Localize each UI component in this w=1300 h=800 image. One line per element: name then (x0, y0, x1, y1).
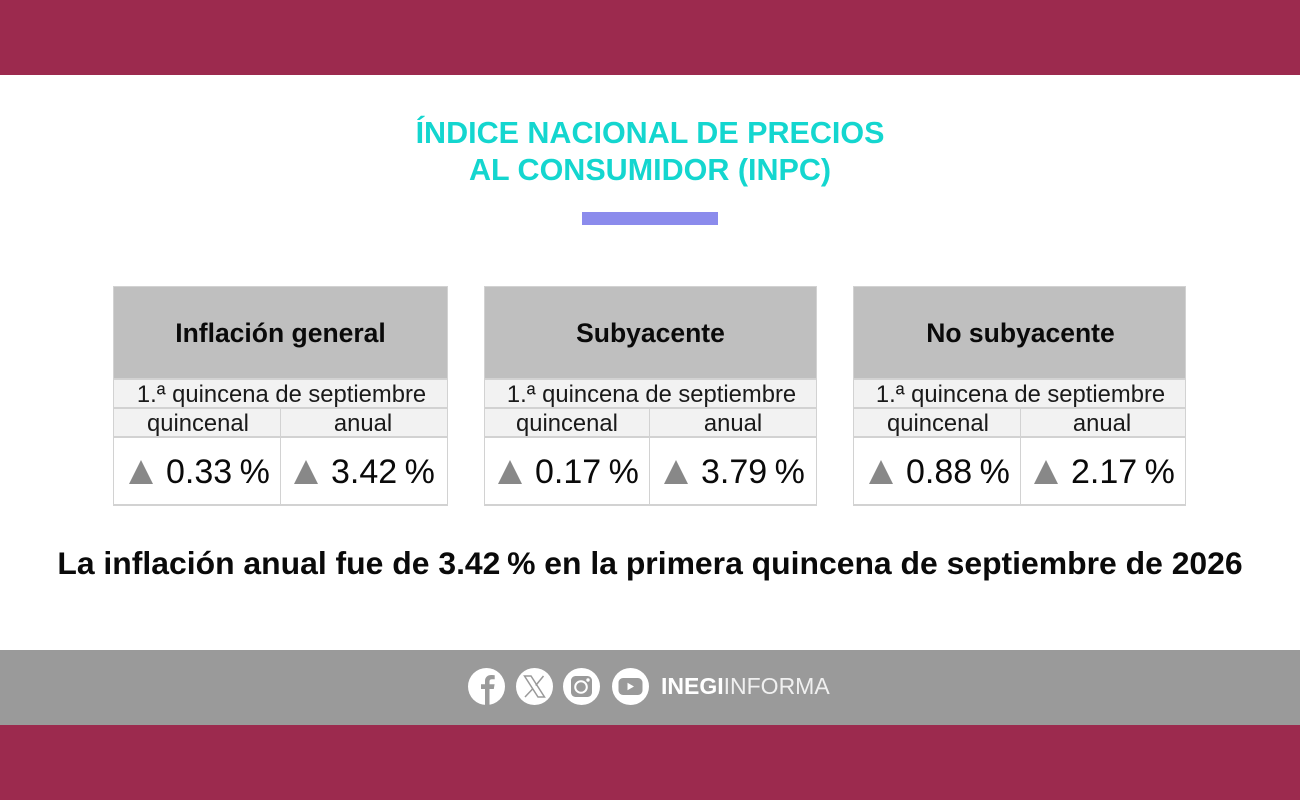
footer grey band (0, 650, 1300, 725)
value: anual 2.17: 2.17 % (1071, 453, 1175, 491)
column label: anual: anual (704, 410, 762, 437)
value: anual 3.42 (281, 438, 447, 504)
period label: 1.ª quincena de septiembre (507, 381, 796, 408)
value: anual 3.79: 3.79 % (701, 453, 805, 491)
column label: anual: anual (334, 410, 392, 437)
value: quincenal 0.88 (854, 438, 1020, 504)
value: anual 3.79 (650, 438, 816, 504)
panel: subyacente (484, 286, 817, 506)
period label: 1.ª quincena de septiembre (137, 381, 426, 408)
title (416, 116, 884, 187)
heading: inflación general: Inflación general (175, 318, 386, 348)
icon: youtube (612, 668, 649, 705)
value: quincenal 0.17 (485, 438, 649, 504)
panel: no subyacente (853, 286, 1186, 506)
column label: quincenal (485, 409, 649, 436)
panel: inflación general (113, 286, 448, 506)
heading: subyacente: Subyacente (576, 318, 725, 348)
heading: subyacente (485, 287, 816, 378)
value: quincenal 0.33 (114, 438, 280, 504)
icon: facebook (468, 668, 505, 705)
heading: no subyacente: No subyacente (926, 318, 1115, 348)
value: quincenal 0.33: 0.33 % (166, 453, 270, 491)
value: quincenal 0.17: 0.17 % (535, 453, 639, 491)
value: anual 2.17 (1021, 438, 1185, 504)
column label: quincenal: quincenal (516, 410, 618, 437)
column label: quincenal: quincenal (147, 410, 249, 437)
headline statement: La inflación anual fue de 3.42 % en la primera quincena de septiembre de 2026 (57, 545, 1243, 581)
heading: inflación general (114, 287, 447, 378)
column label: anual (1021, 409, 1185, 436)
footer wordmark: INEGIINFORMA (661, 673, 830, 699)
title: ÍNDICE NACIONAL DE PRECIOS (416, 116, 884, 150)
value: anual 3.42: 3.42 % (331, 453, 435, 491)
column label: anual (650, 409, 816, 436)
top band (0, 0, 1300, 75)
value: quincenal 0.88: 0.88 % (906, 453, 1010, 491)
title: AL CONSUMIDOR (INPC) (469, 153, 831, 187)
bottom band (0, 725, 1300, 800)
icon: instagram (563, 668, 600, 705)
column label: quincenal (854, 409, 1020, 436)
column label: quincenal (114, 409, 280, 436)
period label: 1.ª quincena de septiembre (876, 381, 1165, 408)
column label: anual (281, 409, 447, 436)
heading: no subyacente (854, 287, 1185, 378)
column label: anual: anual (1073, 410, 1131, 437)
icon: x (516, 668, 553, 705)
title accent bar (582, 212, 718, 225)
column label: quincenal: quincenal (887, 410, 989, 437)
